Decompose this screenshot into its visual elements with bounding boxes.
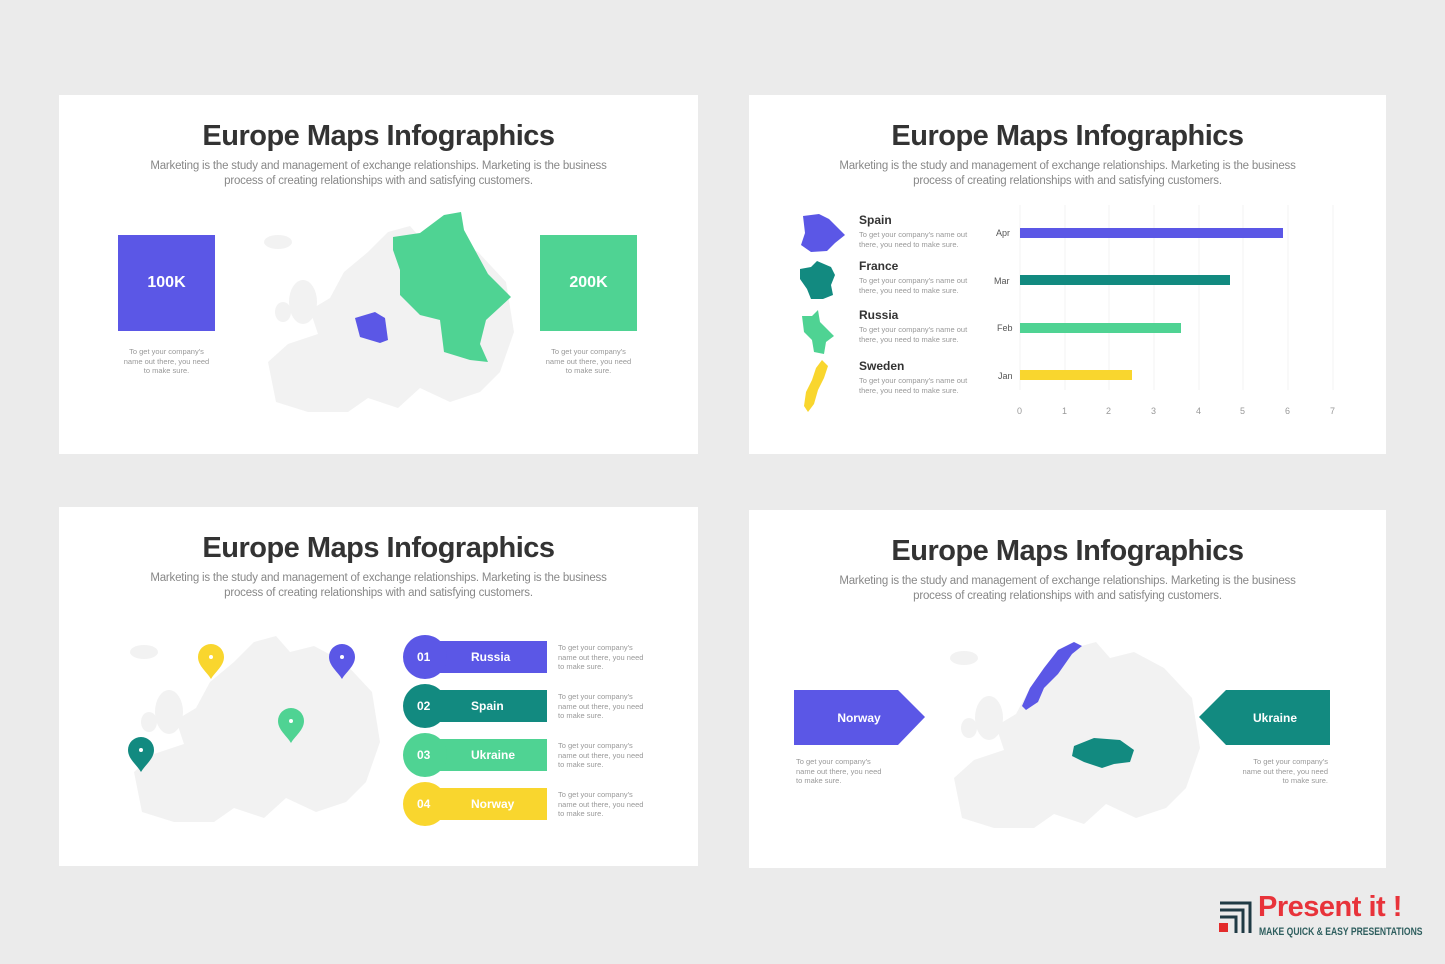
list: numbered items: Russia	[471, 650, 510, 664]
subtitle: Marketing is the study and management of exchange relationships. Marketing is the business	[150, 160, 607, 172]
arrow: Ukraine	[1199, 690, 1330, 745]
list: numbered items: Norway	[471, 797, 514, 811]
subtitle: process of creating relationships with and satisfying customers.	[224, 174, 533, 186]
subtitle: process of creating relationships with and satisfying customers.	[224, 586, 533, 598]
list: numbered items: Ukraine	[471, 748, 515, 762]
panel: bottom-right	[749, 510, 1386, 868]
bar chart: 1	[1062, 406, 1067, 416]
panel: top-right	[749, 95, 1386, 454]
list: numbered items	[403, 635, 643, 826]
stat box: 100K	[118, 235, 215, 331]
country list: Spain	[859, 213, 892, 227]
arrow: Norway	[794, 690, 925, 745]
subtitle: Marketing is the study and management of exchange relationships. Marketing is the business	[839, 575, 1296, 587]
bar chart: 2	[1106, 406, 1111, 416]
list: numbered items: 02	[417, 699, 430, 713]
text: 200K caption: To get your company's name out there, you need to make sure.	[546, 347, 631, 375]
list: numbered items: To get your company's name out there, you need to make sure.	[558, 741, 643, 769]
subtitle: Marketing is the study and management of exchange relationships. Marketing is the business	[150, 572, 607, 584]
country list: France	[859, 259, 898, 273]
bar chart	[994, 205, 1335, 416]
list: numbered items: 03	[417, 748, 430, 762]
logo: Present it	[1219, 891, 1423, 938]
bar chart: 4	[1196, 406, 1201, 416]
subtitle	[839, 160, 1296, 186]
panel: top-left	[59, 95, 698, 454]
subtitle	[150, 572, 607, 598]
logo: Present it: MAKE QUICK & EASY PRESENTATIONS	[1259, 926, 1423, 938]
stat box: 200K: 200K	[569, 274, 608, 291]
arrow: Norway: Norway	[837, 711, 881, 725]
country list	[800, 213, 968, 412]
bar chart: 0	[1017, 406, 1022, 416]
subtitle: process of creating relationships with and satisfying customers.	[913, 174, 1222, 186]
list: numbered items: Spain	[471, 699, 504, 713]
stat box: 100K: 100K	[147, 274, 186, 291]
text: Norway caption: To get your company's name out there, you need to make sure.	[796, 757, 881, 785]
bar chart: Jan	[998, 371, 1013, 381]
country list: Russia	[859, 308, 898, 322]
subtitle	[150, 160, 607, 186]
map: Norway and Ukraine	[950, 642, 1200, 828]
subtitle: Marketing is the study and management of exchange relationships. Marketing is the business	[839, 160, 1296, 172]
map: Russia and Poland	[264, 212, 514, 412]
bar chart: 3	[1151, 406, 1156, 416]
country list: To get your company's name out there, you need to make sure.	[859, 325, 967, 344]
list: numbered items: To get your company's name out there, you need to make sure.	[558, 643, 643, 671]
subtitle: process of creating relationships with and satisfying customers.	[913, 590, 1222, 602]
icon: France	[800, 261, 835, 299]
text: Ukraine caption: To get your company's name out there, you need to make sure.	[1243, 757, 1328, 785]
bar chart: 7	[1330, 406, 1335, 416]
arrow: Ukraine: Ukraine	[1253, 711, 1297, 725]
country list: To get your company's name out there, you need to make sure.	[859, 230, 967, 248]
icon: Spain	[801, 214, 845, 252]
bar chart: 5	[1240, 406, 1245, 416]
subtitle	[839, 575, 1296, 602]
bar chart: Feb	[997, 323, 1013, 333]
text: 100K caption: To get your company's name out there, you need to make sure.	[124, 347, 209, 375]
bar chart: 6	[1285, 406, 1290, 416]
title: Europe Maps Infographics	[891, 120, 1244, 152]
icon: Russia	[802, 310, 834, 354]
list: numbered items: 01	[417, 650, 430, 664]
logo: Present it: Present it !	[1258, 891, 1402, 923]
list: numbered items: To get your company's name out there, you need to make sure.	[558, 692, 643, 720]
list: numbered items: To get your company's name out there, you need to make sure.	[558, 790, 643, 818]
country list: Sweden	[859, 359, 904, 373]
country list: To get your company's name out there, you need to make sure.	[859, 276, 967, 294]
title: Europe Maps Infographics	[891, 535, 1244, 567]
title: Europe Maps Infographics	[202, 532, 555, 564]
list: numbered items: 04	[417, 797, 430, 811]
map with pins	[128, 636, 380, 822]
bar chart: Apr	[996, 228, 1010, 238]
stat box: 200K	[540, 235, 637, 331]
country list: To get your company's name out there, you need to make sure.	[859, 376, 967, 394]
bar chart: Mar	[994, 276, 1010, 286]
title: Europe Maps Infographics	[202, 120, 555, 152]
icon: Sweden	[804, 360, 828, 412]
panel: bottom-left	[59, 507, 698, 866]
